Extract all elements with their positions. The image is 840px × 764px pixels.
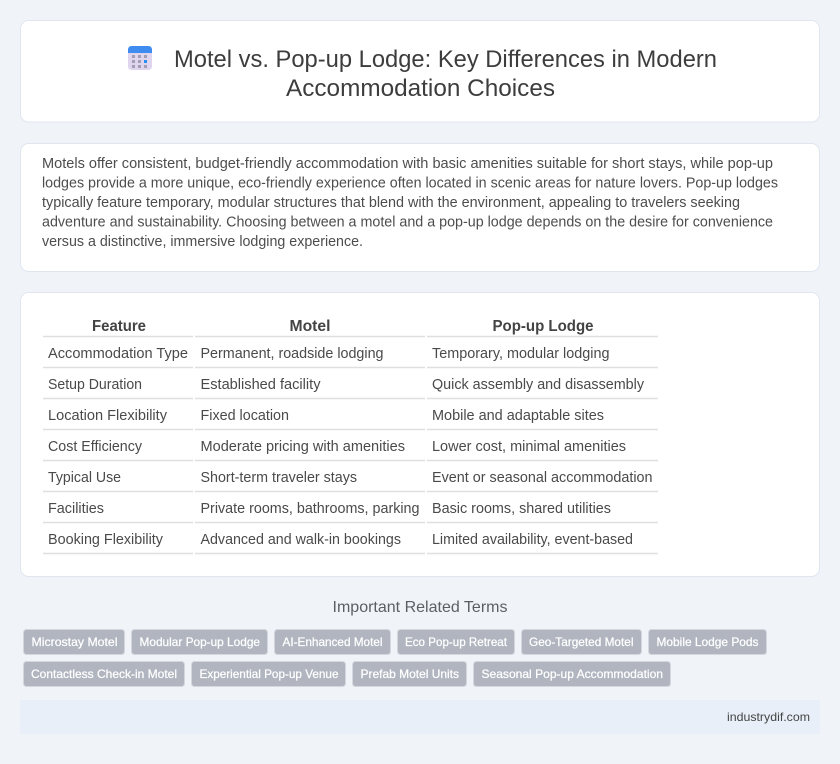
row: setup duration: Established facility [200, 377, 321, 393]
tag: Mobile Lodge Pods [648, 630, 766, 654]
row: location flexibility: Fixed location [200, 408, 289, 424]
row: typical use: Short-term traveler stays [200, 470, 357, 486]
panel: comparison table [20, 292, 820, 576]
row: setup duration: Setup Duration [48, 377, 142, 393]
footer bar [20, 700, 820, 734]
title: Accommodation Choices [286, 75, 555, 102]
tag: Experiential Pop-up Venue: Experiential Pop-up Venue [200, 667, 339, 681]
tag: Microstay Motel [24, 630, 124, 654]
heading: important related terms: Important Related Terms [332, 599, 508, 616]
table header [92, 318, 594, 335]
tag: Geo-Targeted Motel [522, 630, 642, 654]
tag: Prefab Motel Units [352, 662, 466, 686]
table header: Motel [290, 318, 330, 335]
tag: AI-Enhanced Motel [274, 630, 390, 654]
row: facilities [48, 501, 611, 517]
tag: Seasonal Pop-up Accommodation [474, 662, 670, 686]
row: facilities: Private rooms, bathrooms, parking [200, 501, 420, 517]
title: Motel vs. Pop-up Lodge: Key Differences in Modern [174, 46, 717, 73]
row: facilities: Basic rooms, shared utilities [432, 501, 611, 517]
row: location flexibility: Location Flexibility [48, 408, 168, 424]
row: cost efficiency [48, 439, 626, 455]
summary text: typically feature temporary, modular structures that blend with the environment, appealing to travelers seeking [42, 195, 740, 211]
table header: Feature [92, 318, 146, 335]
summary text: versus a distinctive, immersive lodging experience. [42, 234, 363, 250]
tag: Geo-Targeted Motel: Geo-Targeted Motel [529, 635, 634, 649]
row: booking flexibility [48, 532, 633, 548]
row: accommodation type: Permanent, roadside lodging [200, 346, 384, 362]
summary text: adventure and sustainability. Choosing between a motel and a pop-up lodge depends on the desire for convenience [42, 214, 773, 230]
summary text [42, 156, 778, 250]
row: setup duration: Quick assembly and disassembly [432, 377, 645, 393]
table grid lines [43, 336, 658, 554]
panel: header [20, 20, 820, 122]
tag: Experiential Pop-up Venue [192, 662, 346, 686]
row: typical use [48, 470, 652, 486]
row: cost efficiency: Lower cost, minimal amenities [432, 439, 626, 455]
tag: Modular Pop-up Lodge: Modular Pop-up Lodge [140, 635, 260, 649]
tag: Eco Pop-up Retreat [398, 630, 514, 654]
panel: summary [20, 144, 820, 272]
summary text: Motels offer consistent, budget-friendly accommodation with basic amenities suitable for short stays, while pop-up [42, 156, 773, 172]
table header: Pop-up Lodge [492, 318, 594, 335]
row: accommodation type: Temporary, modular lodging [432, 346, 610, 362]
tag: Contactless Check-in Motel: Contactless Check-in Motel [31, 667, 177, 681]
row: booking flexibility: Advanced and walk-in bookings [200, 532, 401, 548]
tag: Eco Pop-up Retreat: Eco Pop-up Retreat [405, 635, 508, 649]
row: facilities: Facilities [48, 501, 104, 517]
row: booking flexibility: Booking Flexibility [48, 532, 164, 548]
icon: calendar [128, 46, 152, 70]
row: setup duration [48, 377, 645, 393]
tag: Modular Pop-up Lodge [132, 630, 268, 654]
row: cost efficiency: Cost Efficiency [48, 439, 143, 455]
summary text: lodges provide a more unique, eco-friendly experience often located in scenic areas for nature lovers. Pop-up lodges [42, 176, 778, 192]
row: typical use: Event or seasonal accommodation [432, 470, 652, 486]
title [174, 46, 717, 102]
row: cost efficiency: Moderate pricing with amenities [200, 439, 405, 455]
tag: Contactless Check-in Motel [24, 662, 184, 686]
tag: Seasonal Pop-up Accommodation: Seasonal Pop-up Accommodation [482, 667, 663, 681]
row: accommodation type [48, 346, 610, 362]
footer site name: industrydif.com [727, 710, 810, 724]
row: location flexibility: Mobile and adaptable sites [432, 408, 604, 424]
row: booking flexibility: Limited availability, event-based [432, 532, 633, 548]
panel: related term tags [24, 630, 766, 686]
tag: AI-Enhanced Motel: AI-Enhanced Motel [282, 635, 382, 649]
row: accommodation type: Accommodation Type [48, 346, 188, 362]
tag: Prefab Motel Units: Prefab Motel Units [360, 667, 459, 681]
row: location flexibility [48, 408, 604, 424]
tag: Mobile Lodge Pods: Mobile Lodge Pods [656, 635, 758, 649]
tag: Microstay Motel: Microstay Motel [32, 635, 118, 649]
row: typical use: Typical Use [48, 470, 121, 486]
